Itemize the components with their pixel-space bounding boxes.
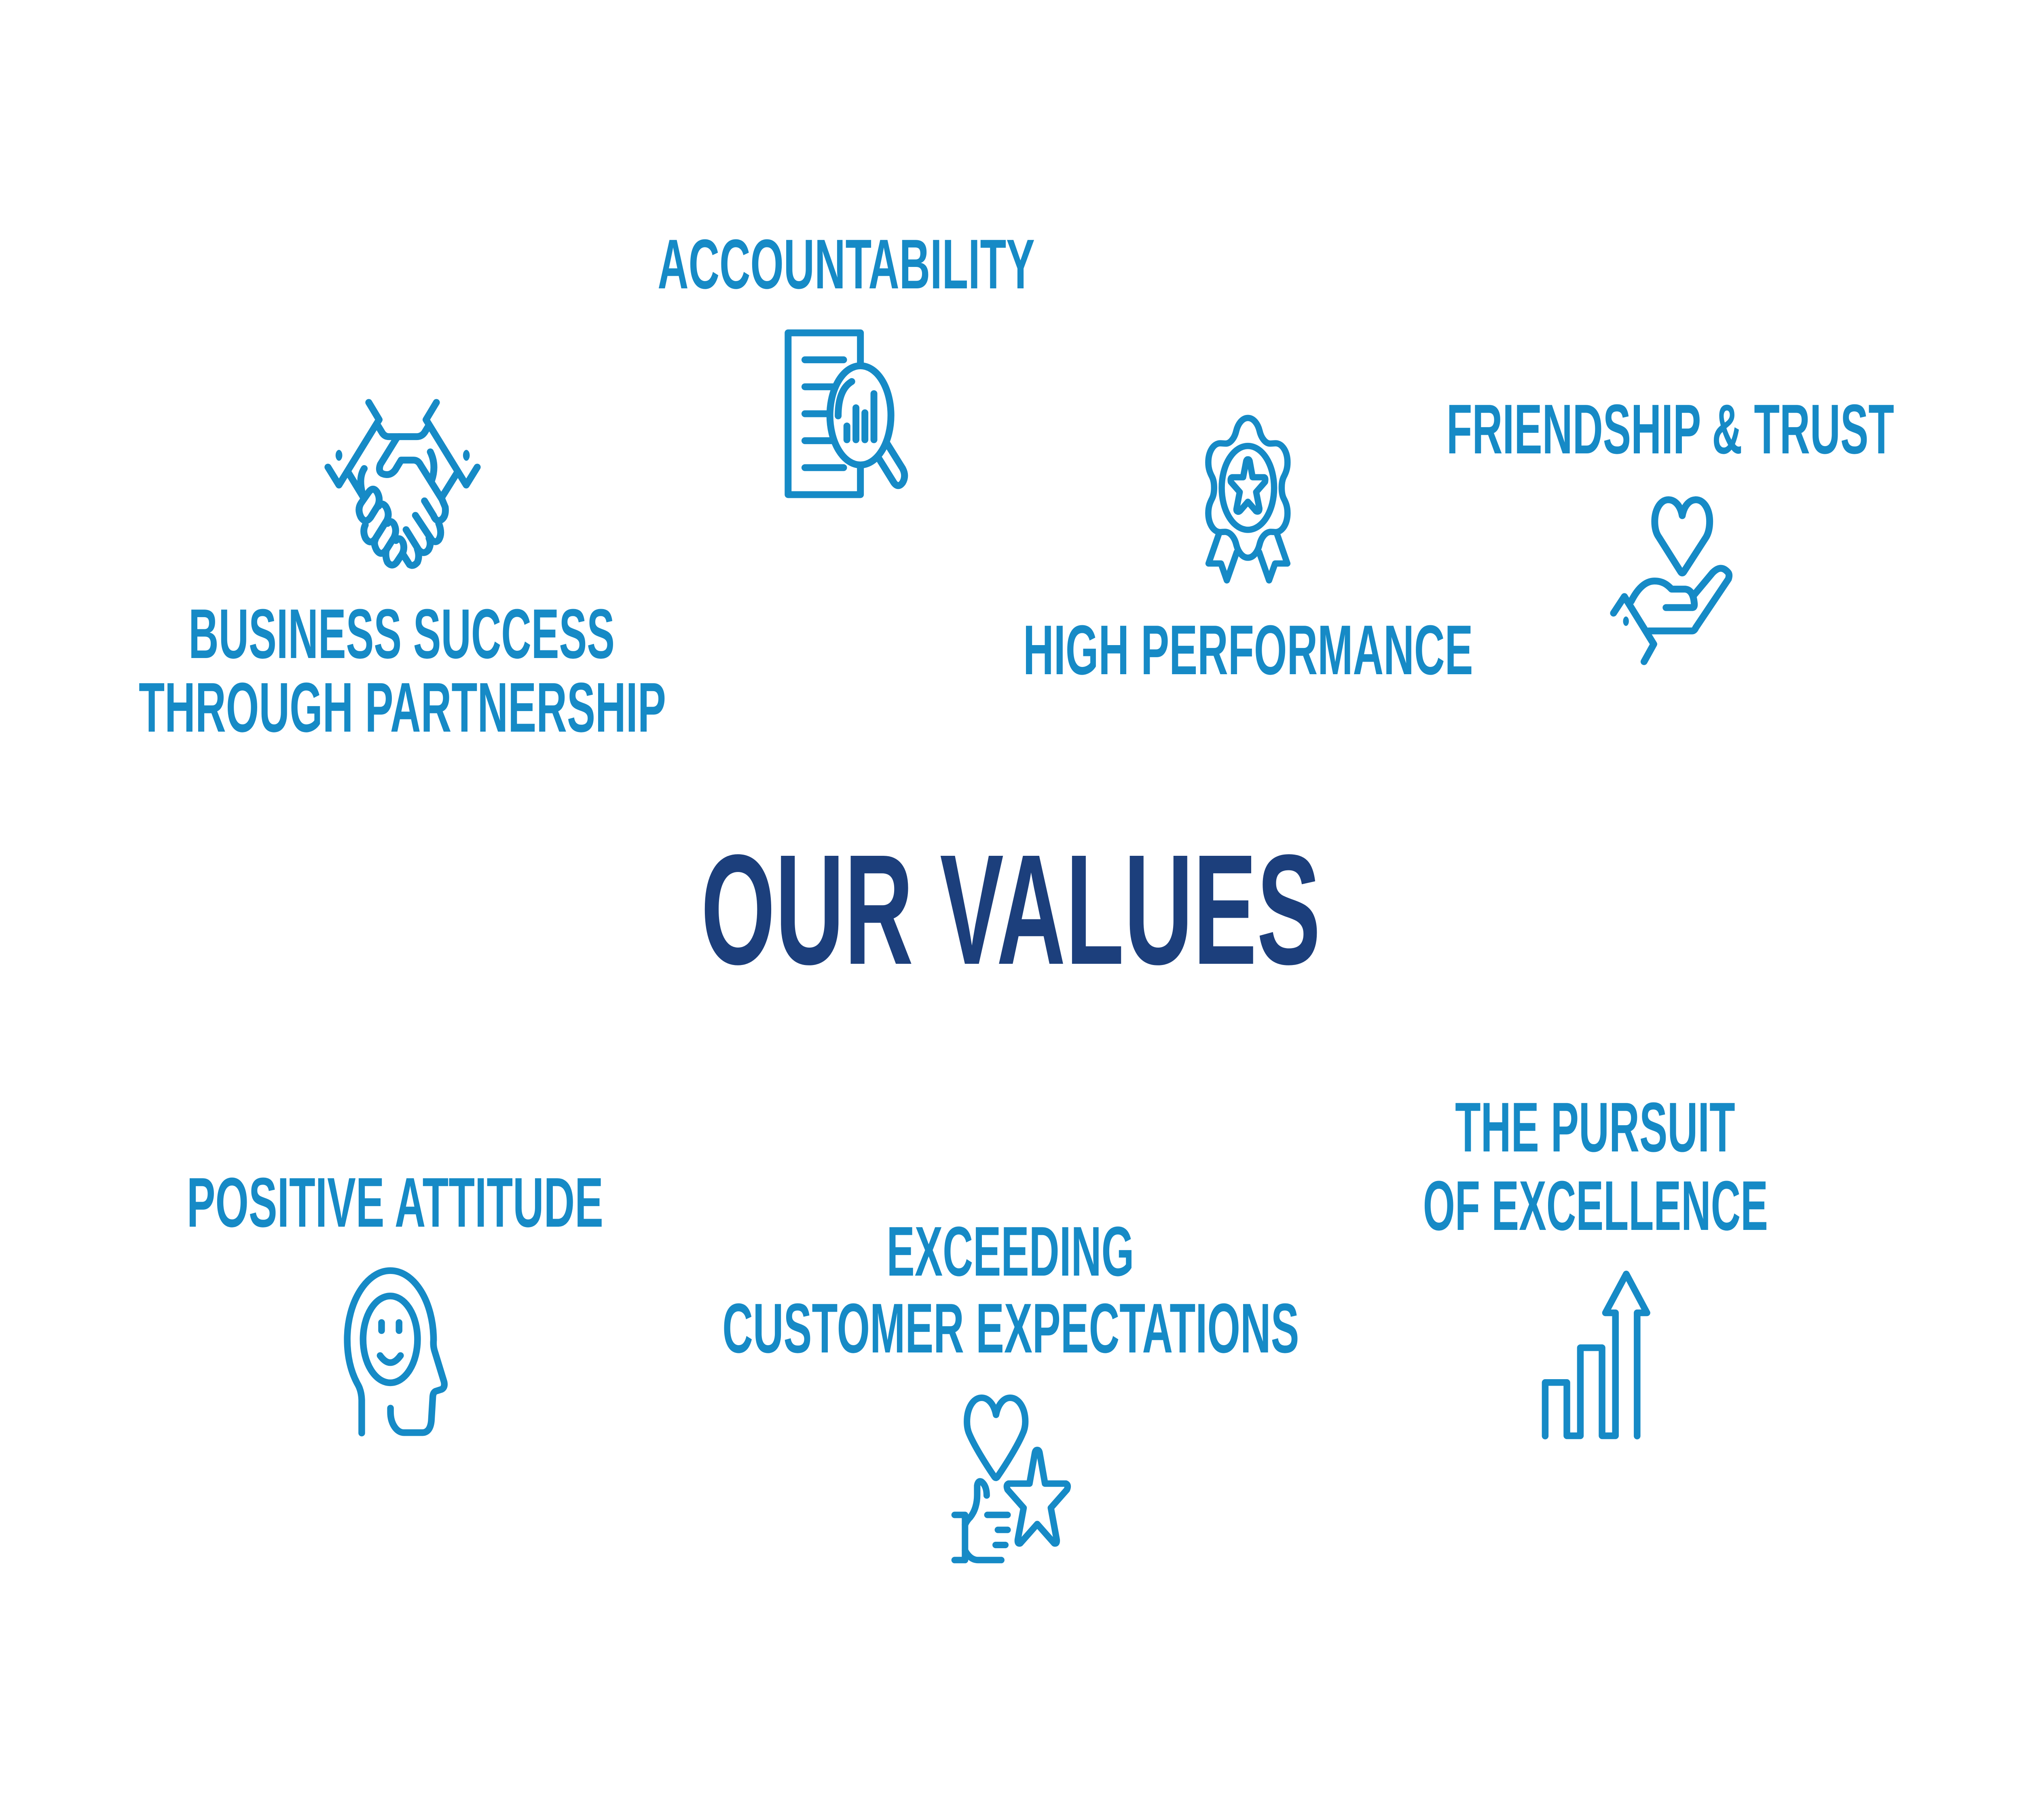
panel: accountability	[658, 225, 1035, 495]
label: customer expectations: CUSTOMER EXPECTATIONS	[722, 1289, 1299, 1367]
panel: positive attitude	[187, 1163, 603, 1433]
panel: exceeding customer expectations	[722, 1212, 1299, 1560]
icon: heart, thumbs up and star	[955, 1398, 1068, 1560]
icon: heart in hand	[1614, 500, 1729, 662]
panel: business success through partnership	[139, 402, 666, 747]
icon: handshake	[328, 402, 477, 565]
title: OUR VALUES	[701, 822, 1321, 997]
label: accountability: ACCOUNTABILITY	[658, 225, 1035, 303]
label: business success: BUSINESS SUCCESS	[188, 595, 615, 673]
label: friendship and trust: FRIENDSHIP & TRUST	[1447, 390, 1894, 468]
icon: head with smiley	[347, 1271, 444, 1433]
label: the pursuit: THE PURSUIT	[1455, 1088, 1735, 1166]
label: positive attitude: POSITIVE ATTITUDE	[187, 1163, 603, 1242]
label: exceeding: EXCEEDING	[886, 1212, 1134, 1291]
icon: award rosette	[1208, 418, 1288, 580]
icon: document with magnifier	[788, 333, 905, 495]
panel: high performance	[1023, 418, 1473, 689]
label: through partnership: THROUGH PARTNERSHIP	[139, 668, 666, 747]
panel: friendship and trust	[1447, 390, 1894, 662]
label: of excellence: OF EXCELLENCE	[1423, 1166, 1768, 1245]
panel: the pursuit of excellence	[1423, 1088, 1768, 1436]
label: high performance: HIGH PERFORMANCE	[1023, 611, 1473, 689]
icon: rising bars with arrow	[1545, 1274, 1647, 1436]
